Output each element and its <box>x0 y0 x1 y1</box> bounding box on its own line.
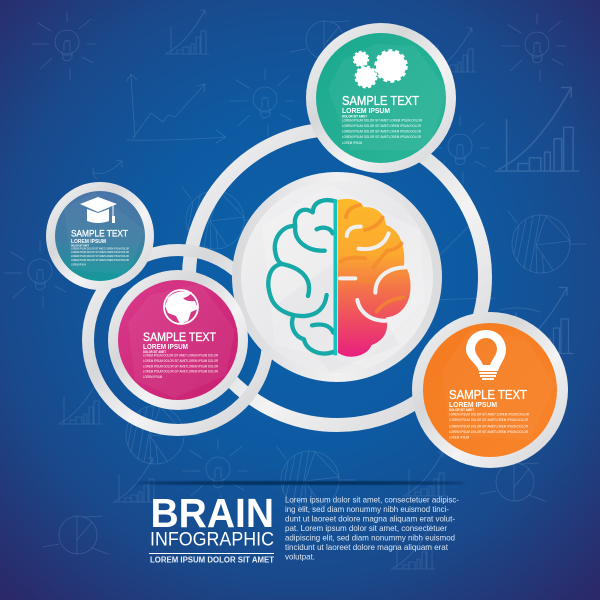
text block: body paragraph: ing elit, sed diam nonummy nibh euismod tinci- <box>285 504 449 514</box>
text: pink panel: SAMPLE TEXT <box>143 330 217 344</box>
title: INFOGRAPHIC <box>150 528 274 550</box>
icon: globe <box>164 290 198 324</box>
text: orange panel <box>449 388 529 440</box>
icon: two-colour brain <box>268 199 411 357</box>
title: BRAIN <box>150 490 274 536</box>
text: green panel: LOREM IPSUM <box>342 106 390 115</box>
text: teal panel: SAMPLE TEXT <box>71 228 128 238</box>
text: teal panel: LOREM IPSUM DOLOR SIT AMETLOREM IPSUM DOLOR <box>71 255 129 258</box>
panel: teal circle <box>46 182 154 290</box>
text: orange panel: LOREM IPSUM DOLOR SIT AMETLOREM IPSUM DOLOR <box>449 430 528 434</box>
text: orange panel: LOREM IPSUM <box>449 436 469 440</box>
text: pink panel: DOLOR SIT AMET <box>143 350 166 354</box>
text: orange panel: LOREM IPSUM DOLOR SIT AMET LOREM IPSUM DOLOR <box>449 412 529 416</box>
text: teal panel: LOREM IPSUM <box>71 239 106 245</box>
text block: body paragraph: tincidunt ut laoreet dolore magna aliquam erat <box>285 542 449 552</box>
icon: gears <box>354 51 406 87</box>
title: LOREM IPSUM DOLOR SIT AMET <box>150 556 274 564</box>
text block: body paragraph: dunt ut laoreet dolore magna aliquam erat volut- <box>285 514 455 524</box>
text: pink panel: LOREM IPSUM <box>143 342 188 351</box>
text: pink panel: LOREM IPSUM DOLOR SIT AMETLOREM IPSUM DOLOR <box>143 370 218 374</box>
text: teal panel: LOREM IPSUM <box>71 264 86 266</box>
panel: green circle <box>306 23 456 173</box>
text: teal panel: DOLOR SIT AMET <box>71 244 89 248</box>
text block: body paragraph <box>285 494 459 562</box>
right brain hemisphere <box>338 199 411 357</box>
text: green panel: LOREM IPSUM DOLOR SIT AMETLOREM IPSUM DOLOR <box>342 130 421 134</box>
text: green panel: LOREM IPSUM DOLOR SIT AMET LOREM IPSUM DOLOR <box>342 118 422 122</box>
text: orange panel: SAMPLE TEXT <box>449 388 527 402</box>
text: green panel <box>342 94 422 145</box>
text: teal panel: LOREM IPSUM DOLOR SIT AMETLOREM IPSUM DOLOR <box>71 251 129 254</box>
text: teal panel <box>71 228 129 266</box>
title <box>149 490 274 564</box>
text: pink panel: LOREM IPSUM DOLOR SIT AMETLOREM IPSUM DOLOR <box>143 364 218 368</box>
icon: graduation cap <box>80 197 117 223</box>
text: pink panel <box>143 330 218 379</box>
panel: pink circle <box>108 270 248 410</box>
text: green panel: LOREM IPSUM DOLOR SIT AMETLOREM IPSUM DOLOR <box>342 135 421 139</box>
text: pink panel: LOREM IPSUM <box>143 375 162 379</box>
icon: light bulb <box>466 330 506 380</box>
midline <box>330 199 341 355</box>
text: orange panel: LOREM IPSUM DOLOR SIT AMETLOREM IPSUM DOLOR <box>449 424 528 428</box>
text: orange panel: DOLOR SIT AMET <box>449 408 475 412</box>
text: pink panel: LOREM IPSUM DOLOR SIT AMETLOREM IPSUM DOLOR <box>143 359 218 363</box>
panel: brain centre circle <box>232 172 442 382</box>
left brain outline <box>268 200 335 353</box>
text: green panel: LOREM IPSUM DOLOR SIT AMETLOREM IPSUM DOLOR <box>342 124 421 128</box>
text block: body paragraph: Lorem ipsum dolor sit amet, consectetuer adipisc- <box>285 494 459 504</box>
text: orange panel: LOREM IPSUM <box>449 400 497 409</box>
text block: body paragraph: pat. Lorem ipsum dolor sit amet, consectetuer <box>285 523 447 533</box>
text: green panel: DOLOR SIT AMET <box>342 114 368 118</box>
text: teal panel: LOREM IPSUM DOLOR SIT AMETLOREM IPSUM DOLOR <box>71 259 129 262</box>
text: teal panel: LOREM IPSUM DOLOR SIT AMET LOREM IPSUM DOLOR <box>71 248 129 250</box>
text: green panel: LOREM IPSUM <box>342 141 362 145</box>
text: green panel: SAMPLE TEXT <box>342 94 419 108</box>
text: orange panel: LOREM IPSUM DOLOR SIT AMETLOREM IPSUM DOLOR <box>449 418 528 422</box>
large ring around centre <box>189 129 485 425</box>
text: pink panel: LOREM IPSUM DOLOR SIT AMET LOREM IPSUM DOLOR <box>143 354 218 358</box>
text block: body paragraph: adipiscing elit, sed diam nonummy nibh euismod <box>285 532 455 542</box>
ring around pink circle <box>88 250 268 430</box>
panel: orange circle <box>412 312 568 468</box>
text block: body paragraph: volutpat. <box>285 552 315 562</box>
footer crease shadow <box>135 481 465 485</box>
